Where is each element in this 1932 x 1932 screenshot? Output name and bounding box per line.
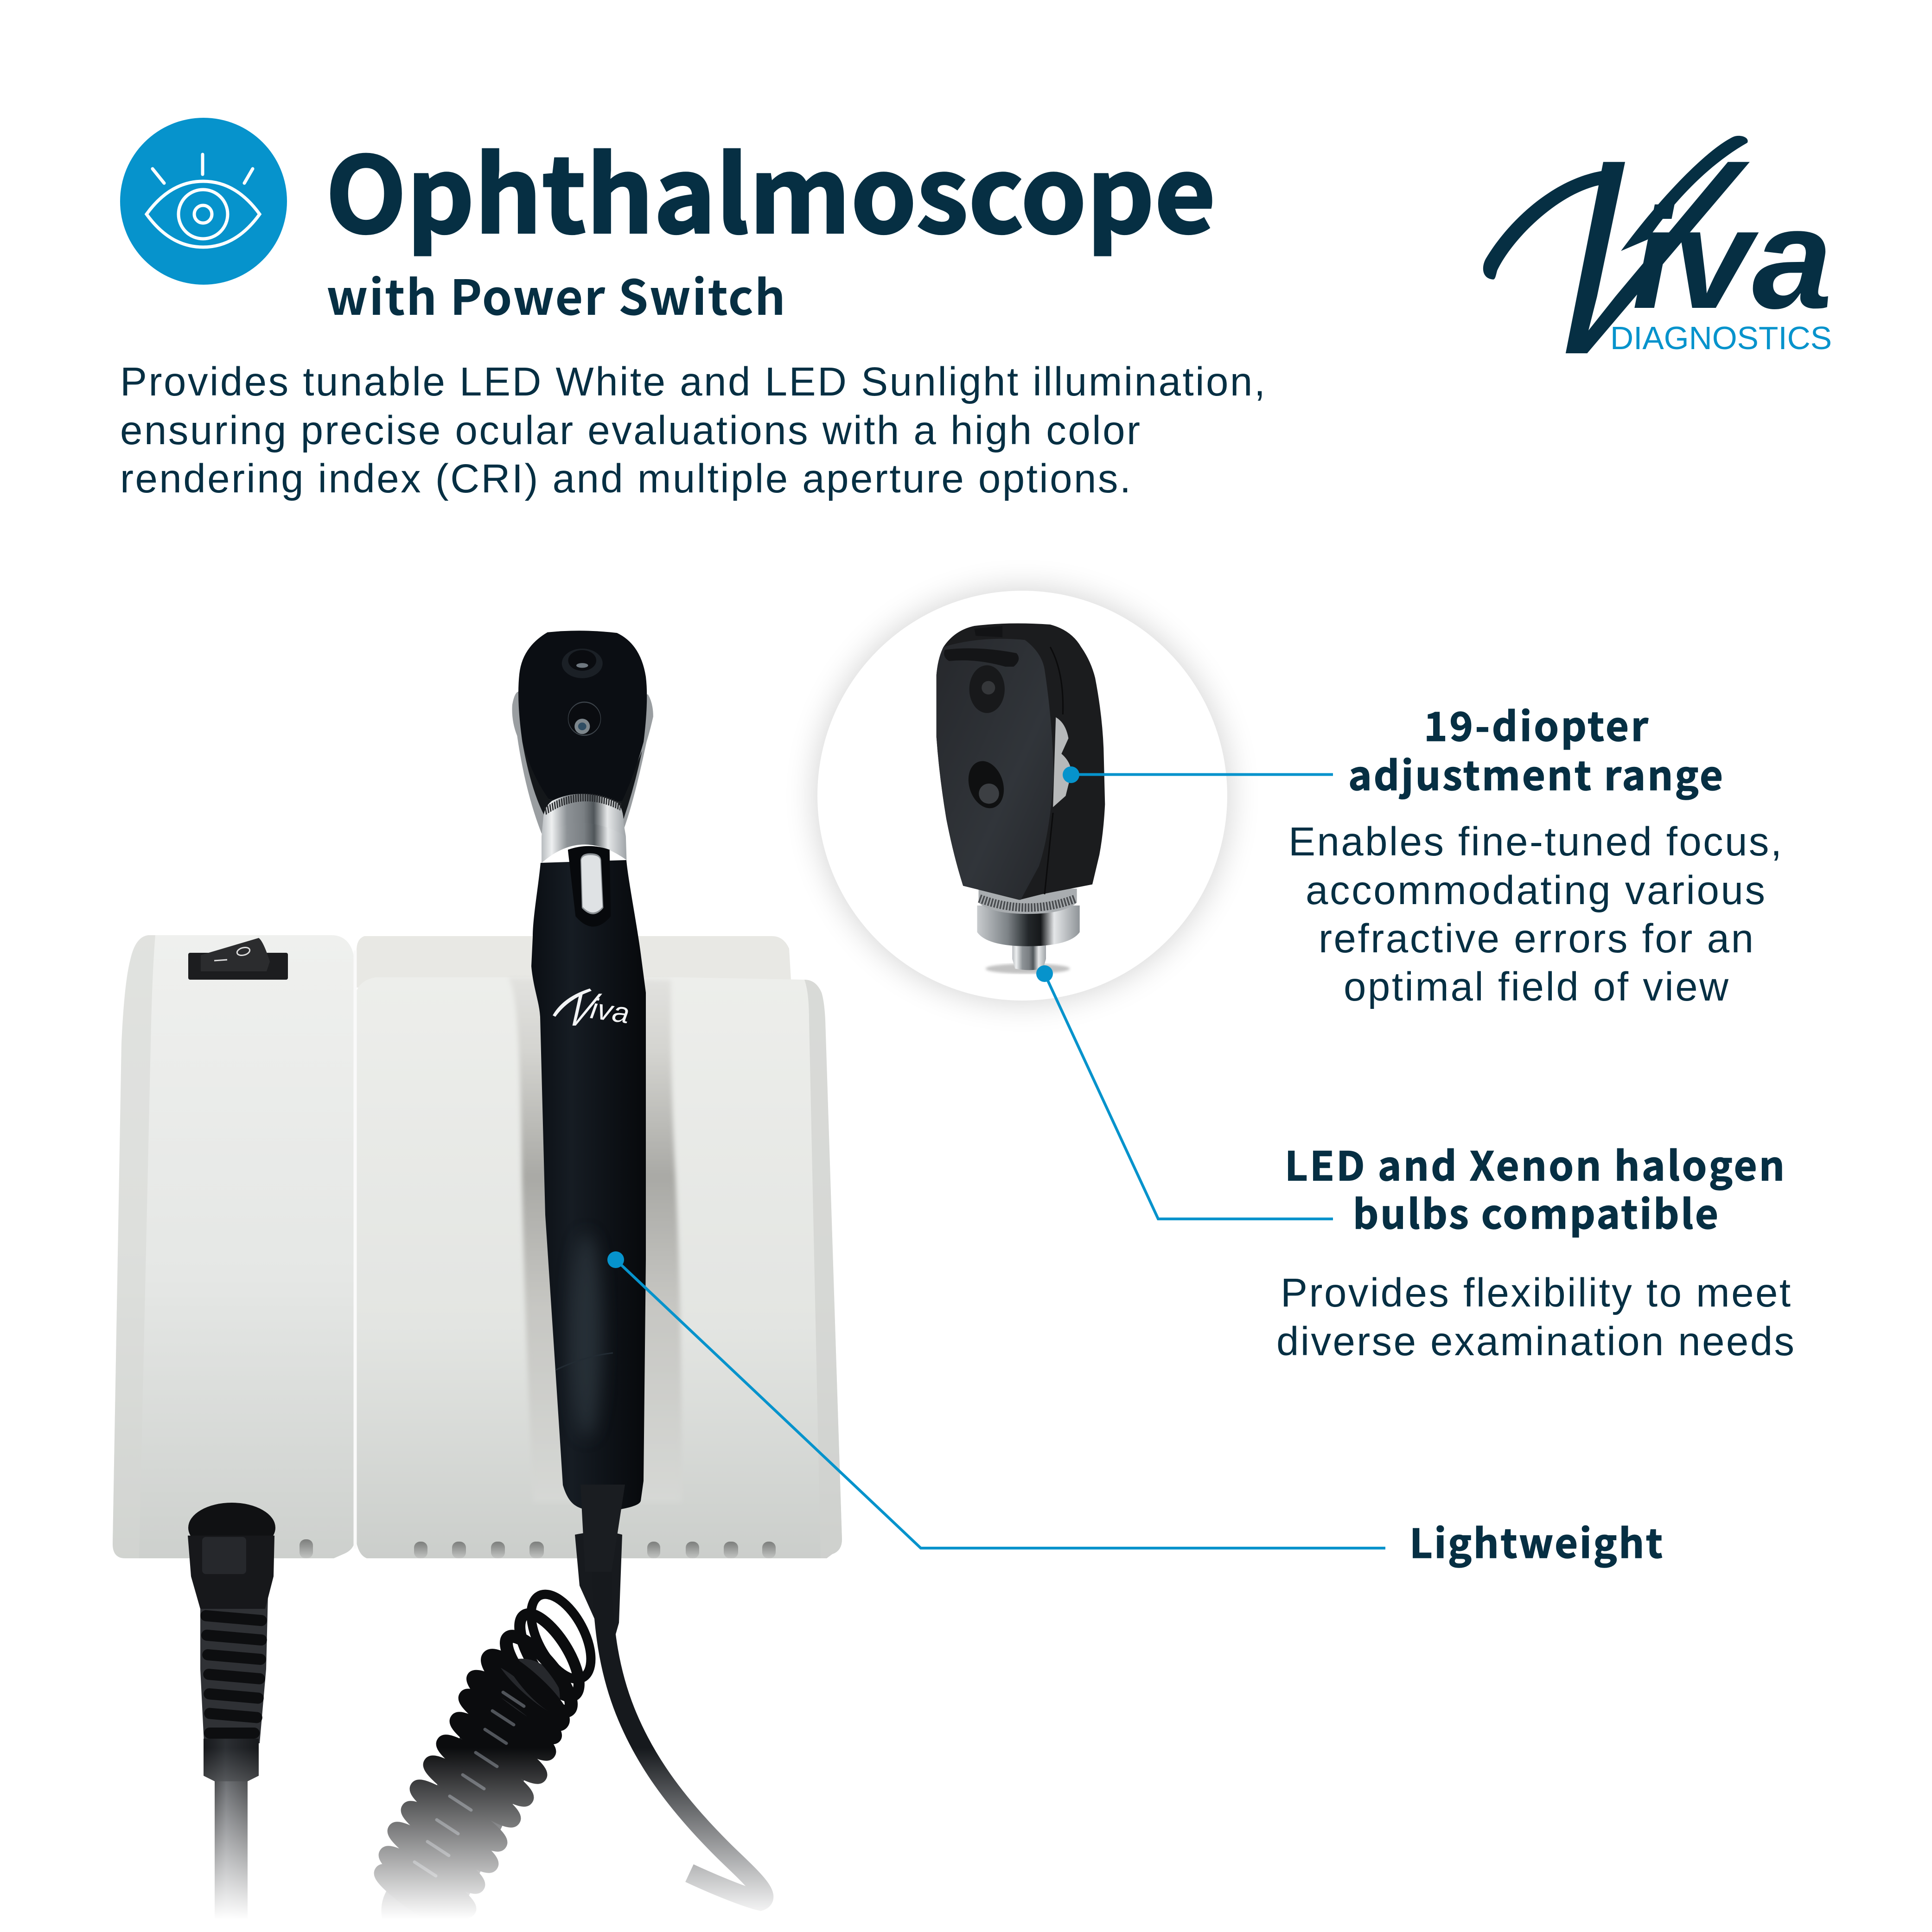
brand on handle bbox=[553, 984, 631, 1036]
head, drawn in zoomed coordinates bbox=[512, 631, 653, 927]
feature: 19-diopter adjustment range: optimal field of view bbox=[1344, 964, 1729, 1009]
power unit housing bbox=[113, 935, 842, 1558]
bracket behind cable bbox=[575, 1532, 622, 1655]
front module bbox=[355, 977, 842, 1558]
base cup bbox=[977, 905, 1080, 946]
icon: eye in blue circle bbox=[120, 118, 287, 285]
front face bbox=[937, 639, 1053, 900]
logo: Viva Diagnostics: V bbox=[1471, 102, 1783, 413]
brand on handle: V bbox=[557, 984, 607, 1036]
panel: zoomed head inset bbox=[816, 589, 1229, 1002]
straight handle cable bbox=[601, 1567, 764, 1901]
feature: 19-diopter adjustment range: accommodating various bbox=[1306, 868, 1765, 913]
callout: lightweight line bbox=[607, 1251, 1385, 1548]
intro text block: rendering index (CRI) and multiple aperture options. bbox=[120, 456, 1131, 501]
seam bbox=[1045, 647, 1063, 894]
feature: Lightweight: Lightweight bbox=[1409, 1511, 1663, 1569]
upper sight hole bbox=[969, 665, 1005, 713]
logo: Viva Diagnostics: iva bbox=[1632, 179, 1832, 338]
feature: LED and Xenon halogen bulbs: Provides flexibility to meet bbox=[1281, 1270, 1791, 1315]
brightness slider bbox=[581, 854, 603, 913]
cradle groove bbox=[508, 977, 682, 1502]
subtitle: with Power Switch bbox=[326, 259, 785, 329]
left module bbox=[113, 935, 355, 1558]
top catch bbox=[974, 626, 1002, 637]
head side shell bbox=[512, 691, 653, 834]
inset circle shadow bbox=[816, 589, 1229, 1002]
strain relief bbox=[580, 1485, 625, 1572]
power cord bbox=[188, 1503, 275, 1932]
housing bbox=[937, 624, 1105, 900]
logo: Viva Diagnostics: DIAGNOSTICS bbox=[1610, 320, 1832, 356]
inset circle bbox=[817, 591, 1227, 1001]
power switch bbox=[188, 938, 288, 980]
upper aperture bbox=[562, 649, 603, 678]
cord collar bbox=[204, 1739, 259, 1781]
strain relief ribs bbox=[200, 1610, 268, 1739]
body highlight bbox=[571, 1233, 602, 1437]
vent slots bbox=[300, 1539, 776, 1558]
cord gland nut bbox=[188, 1503, 275, 1553]
knurled ring bbox=[979, 889, 1077, 914]
feature: LED and Xenon halogen bulbs: LED and Xenon halogen bbox=[1285, 1134, 1785, 1192]
intro text block: Provides tunable LED White and LED Sunlight illumination, bbox=[120, 359, 1265, 404]
feature: 19-diopter adjustment range: Enables fine-tuned focus, bbox=[1288, 819, 1782, 864]
handheld ophthalmoscope bbox=[512, 631, 653, 1572]
floor shadow bbox=[986, 963, 1070, 974]
intro text block bbox=[120, 359, 1265, 501]
knurled ring bbox=[542, 794, 626, 836]
coil highlights bbox=[414, 1692, 524, 1876]
bottom fade over cables bbox=[139, 1748, 835, 1932]
head front plate bbox=[518, 631, 647, 801]
left bevel bbox=[113, 935, 155, 1558]
brand on handle: iva bbox=[588, 993, 631, 1030]
feature: LED and Xenon halogen bulbs: diverse examination needs bbox=[1276, 1319, 1794, 1364]
feature: 19-diopter adjustment range: 19-diopter bbox=[1424, 695, 1649, 752]
neck slider recess bbox=[568, 846, 611, 927]
feature: 19-diopter adjustment range: refractive errors for an bbox=[1319, 916, 1753, 961]
chrome collar bbox=[542, 823, 626, 863]
body seam bbox=[555, 1353, 613, 1370]
seam between modules bbox=[353, 950, 357, 1549]
coil backing mass bbox=[420, 1697, 522, 1910]
title: Ophthalmoscope bbox=[325, 112, 1216, 263]
feature: LED and Xenon halogen bulbs bbox=[1276, 1134, 1794, 1364]
focus wheel bbox=[1053, 717, 1071, 807]
feature: 19-diopter adjustment range: adjustment range bbox=[1348, 744, 1723, 802]
coiled handle cable bbox=[378, 1532, 764, 1932]
feature: LED and Xenon halogen bulbs: bulbs compatible bbox=[1353, 1182, 1718, 1240]
handle body bbox=[531, 860, 646, 1509]
top lever bbox=[944, 648, 1019, 667]
callout: bulbs line bbox=[1036, 965, 1333, 1219]
lower aperture bbox=[568, 702, 601, 735]
intro text block: ensuring precise ocular evaluations with a high color bbox=[120, 408, 1140, 453]
callout: 19-diopter line bbox=[1063, 766, 1333, 783]
right bevel bbox=[804, 980, 842, 1558]
ophthalmoscope head close-up bbox=[937, 624, 1105, 974]
feature: 19-diopter adjustment range bbox=[1288, 695, 1782, 1009]
strain relief backing bbox=[200, 1595, 268, 1743]
lower sight hole bbox=[963, 757, 1010, 813]
contact post bbox=[1012, 937, 1046, 970]
back ridge of housing bbox=[357, 936, 791, 988]
